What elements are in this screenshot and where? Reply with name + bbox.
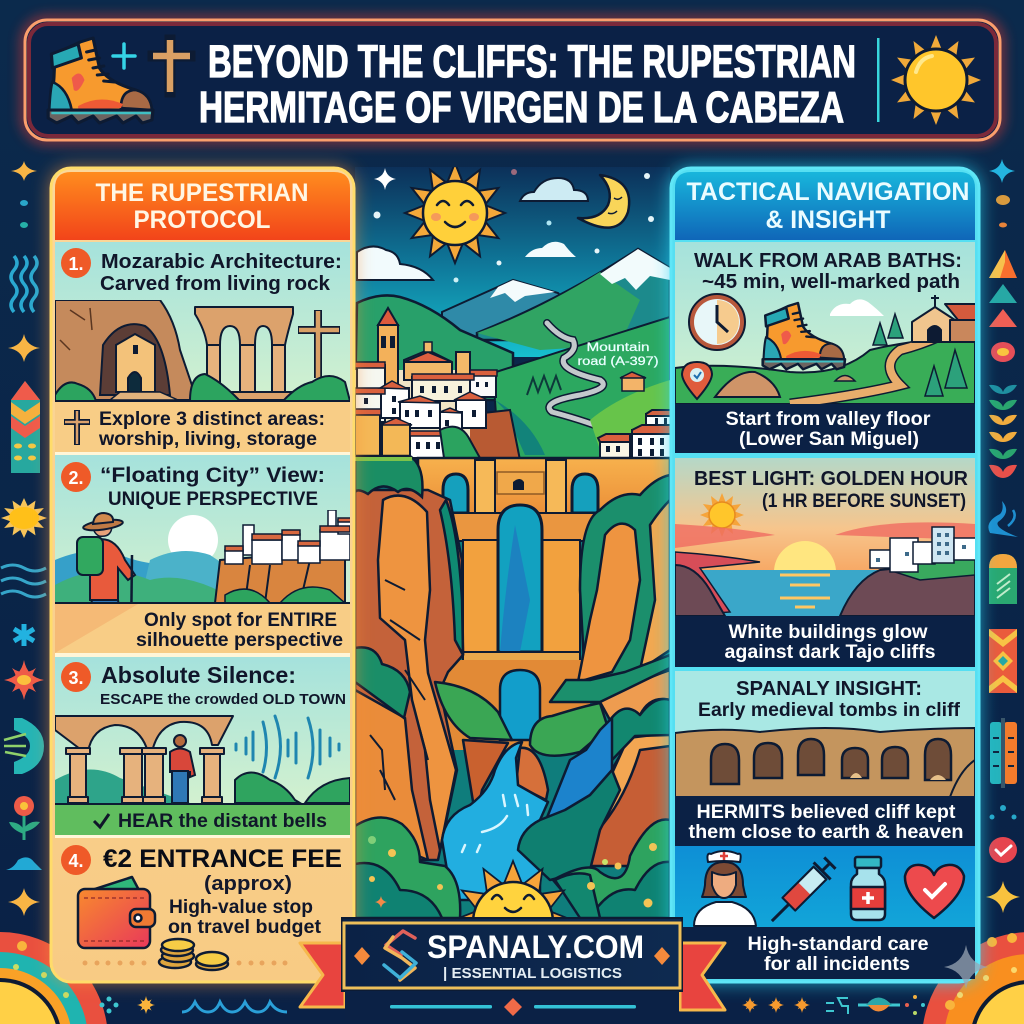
header: protocol: THE RUPESTRIAN xyxy=(96,179,308,207)
ribbon right xyxy=(680,943,725,1010)
icon: person from behind xyxy=(170,735,195,803)
heading: ESCAPE the crowded OLD TOWN xyxy=(100,691,346,708)
icon: title sun xyxy=(891,35,981,125)
caption: high-standard care: for all incidents xyxy=(764,954,910,975)
cross inner xyxy=(65,411,89,444)
heading: (approx) xyxy=(204,873,292,895)
section 1 caption xyxy=(55,402,350,452)
section 4: entrance fee xyxy=(61,845,342,970)
sky xyxy=(355,167,670,357)
logo banner xyxy=(300,918,725,1021)
lower rule and diamond xyxy=(390,998,636,1016)
caption: start from valley floor xyxy=(675,404,975,453)
right column decorations xyxy=(986,159,1020,913)
heading xyxy=(100,251,342,295)
heading: Early medieval tombs in cliff xyxy=(698,700,961,721)
gorge backdrop xyxy=(355,480,670,920)
illustration: city view xyxy=(55,510,352,603)
icon: clock xyxy=(689,294,745,350)
path xyxy=(790,336,940,404)
divider line xyxy=(877,38,880,122)
title banner xyxy=(25,20,1000,140)
section: golden hour xyxy=(675,458,976,616)
bottom decorations xyxy=(100,994,925,1016)
caption: high-standard care xyxy=(675,927,975,979)
number badge 1 xyxy=(61,248,91,278)
left cliff xyxy=(355,490,463,860)
description xyxy=(168,897,322,938)
number badge 2 xyxy=(61,462,91,492)
heading xyxy=(694,468,969,512)
mid bushes xyxy=(435,655,670,820)
description: High-value stop xyxy=(169,897,313,918)
illustration: rock-cut church and arches xyxy=(55,300,350,401)
heading: “Floating City” View: xyxy=(100,464,325,487)
cross fill xyxy=(153,40,190,92)
heading: €2 ENTRANCE FEE xyxy=(103,845,342,873)
caption: start from valley floor: (Lower San Miguel) xyxy=(739,429,919,450)
town left xyxy=(355,308,520,460)
right cliff xyxy=(570,475,670,866)
illustration: sunset over cliffs xyxy=(675,522,976,616)
illustration: arches and listener xyxy=(55,716,350,803)
heading: SPANALY INSIGHT: xyxy=(736,678,922,700)
stars xyxy=(374,168,654,282)
logo plate xyxy=(342,918,682,991)
dots decoration xyxy=(82,960,288,966)
number badge 4: 4. xyxy=(68,851,84,871)
header: tactical navigation: & INSIGHT xyxy=(766,206,890,234)
heading: UNIQUE PERSPECTIVE xyxy=(108,489,318,510)
icon: walking boot xyxy=(763,303,845,369)
icon: chapel xyxy=(911,295,975,343)
icon: check xyxy=(94,814,109,827)
section 1: mozarabic architecture xyxy=(55,242,350,402)
town right xyxy=(598,410,674,460)
icon: bottom sun xyxy=(460,858,567,917)
icon: small cross xyxy=(64,410,90,445)
icon: medicine vial xyxy=(851,857,885,920)
faint sparkle xyxy=(944,945,988,989)
section 1 caption: Explore 3 distinct areas: xyxy=(99,409,325,430)
left column decorations xyxy=(0,161,48,916)
green slope lower right xyxy=(518,770,620,880)
number badge 3 xyxy=(61,662,91,692)
icon: small sun xyxy=(700,493,744,537)
number badge 2: 2. xyxy=(68,468,84,488)
caption: hermits believed xyxy=(675,796,975,846)
heading: (1 HR BEFORE SUNSET) xyxy=(762,491,966,512)
heading: WALK FROM ARAB BATHS: xyxy=(694,250,962,272)
caption: white buildings glow: White buildings glow xyxy=(728,622,928,643)
caption: white buildings glow: against dark Tajo cliffs xyxy=(724,642,936,663)
icon: teal plus xyxy=(113,44,135,68)
section 2 caption: silhouette perspective xyxy=(136,630,343,651)
caption: white buildings glow xyxy=(675,616,975,667)
section 3: absolute silence xyxy=(55,657,350,805)
caption: start from valley floor: Start from valley floor xyxy=(726,409,931,430)
section 3 caption xyxy=(55,805,350,835)
heading xyxy=(698,678,961,721)
bottom bushes xyxy=(355,817,670,918)
header: tactical navigation: TACTICAL NAVIGATION xyxy=(686,178,970,206)
heading xyxy=(103,845,342,895)
illustration: medieval tombs xyxy=(675,728,975,797)
header: protocol: PROTOCOL xyxy=(134,206,270,234)
panel: tactical navigation and insight xyxy=(670,167,988,989)
icon: crescent moon xyxy=(578,175,629,228)
back mountains xyxy=(355,249,670,400)
corner rainbow bottom left xyxy=(0,932,107,1024)
heading: Carved from living rock xyxy=(100,273,331,295)
illustration: walking route xyxy=(675,295,985,404)
center scene xyxy=(355,163,674,979)
icon: syringe xyxy=(763,855,838,930)
number badge 3: 3. xyxy=(68,668,84,688)
icon: location pin xyxy=(682,362,712,399)
caption: hermits believed: them close to earth & heaven xyxy=(688,822,964,843)
lower teal hillside xyxy=(495,400,545,455)
icon: wooden cross xyxy=(153,40,190,92)
clouds xyxy=(357,178,588,280)
corner rainbow bottom right xyxy=(923,932,1024,1024)
hill with chapel xyxy=(527,372,670,450)
heading: ~45 min, well-marked path xyxy=(702,271,960,293)
section: spanaly insight xyxy=(675,671,975,797)
icon: heart with check xyxy=(905,865,964,918)
trees xyxy=(873,314,967,396)
number badge 1: 1. xyxy=(68,254,84,274)
rocks xyxy=(715,372,780,397)
label: mountain road: Mountain xyxy=(586,342,650,354)
icon: smiling sun xyxy=(405,163,505,263)
bush on left cliff xyxy=(355,456,422,497)
bridge xyxy=(418,458,670,750)
label: mountain road: road (A-397) xyxy=(578,356,659,368)
label: mountain road xyxy=(578,342,659,368)
caption: hermits believed: HERMITS believed cliff kept xyxy=(696,802,956,823)
section 2 caption: Only spot for ENTIRE xyxy=(144,610,337,631)
main waterfall xyxy=(442,742,548,900)
heading: title text xyxy=(199,36,856,132)
description: on travel budget xyxy=(168,917,322,938)
mountain road xyxy=(543,319,608,429)
green slope xyxy=(493,317,670,470)
heading xyxy=(100,464,325,510)
section 2: floating city view xyxy=(55,455,350,602)
heading: BEST LIGHT: GOLDEN HOUR xyxy=(694,468,969,490)
icon: hiker xyxy=(77,513,135,644)
header: tactical navigation xyxy=(675,172,975,240)
heading xyxy=(694,250,962,293)
caption: high-standard care: High-standard care xyxy=(748,934,928,955)
section 1 caption: worship, living, storage xyxy=(98,429,317,450)
section 2 caption xyxy=(55,602,350,653)
icon: hiking boot xyxy=(48,38,153,123)
side waterfall xyxy=(546,718,612,820)
logo tagline: | ESSENTIAL LOGISTICS xyxy=(443,965,622,982)
number badge 4 xyxy=(61,845,91,875)
section: medical care xyxy=(675,846,975,930)
icon: nurse xyxy=(694,851,756,926)
heading xyxy=(100,662,346,708)
icon: sound waves xyxy=(236,716,339,778)
section 3 caption: HEAR the distant bells xyxy=(118,811,327,832)
heading: Mozarabic Architecture: xyxy=(101,251,342,273)
heading: Absolute Silence: xyxy=(101,662,296,688)
section: walk from arab baths xyxy=(675,242,985,404)
header: protocol xyxy=(55,172,350,240)
icon: spanaly S mark xyxy=(384,931,416,980)
logo text: SPANALY.COM xyxy=(427,929,644,965)
icon: wallet xyxy=(78,877,155,948)
ribbon left xyxy=(300,943,345,1007)
left side bush xyxy=(355,647,410,718)
icon: coins xyxy=(159,939,228,970)
panel: the rupestrian protocol xyxy=(50,167,355,983)
diamonds xyxy=(354,947,370,965)
